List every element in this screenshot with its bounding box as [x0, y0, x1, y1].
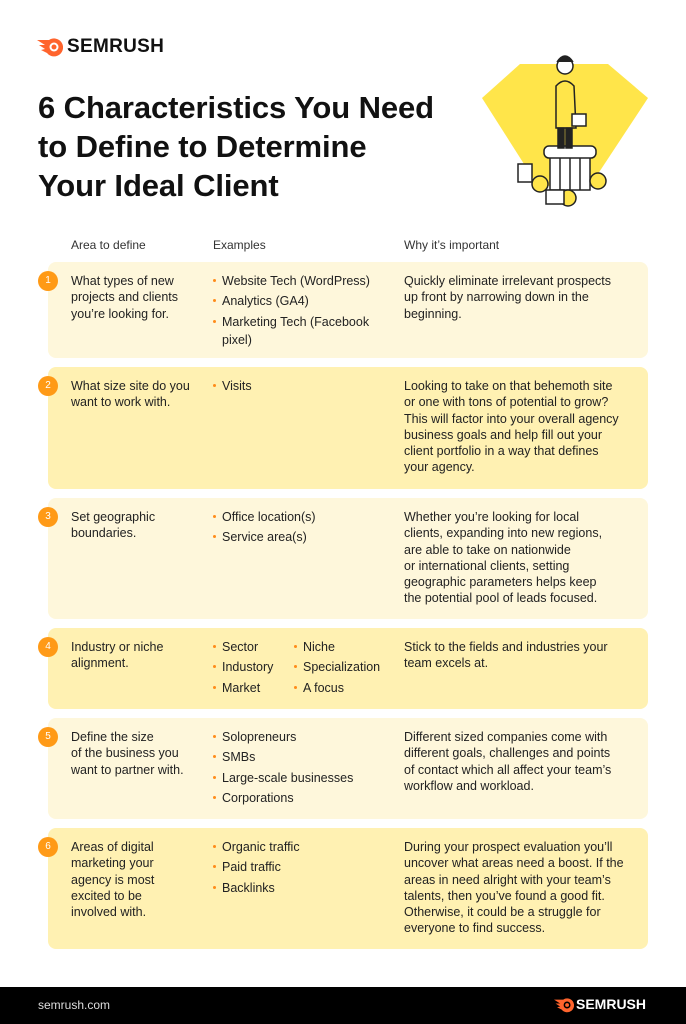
row 6: talents, then you’ve found a good fit.: [404, 889, 605, 903]
row 6: 6: [45, 841, 51, 852]
row 4: Industory: [222, 660, 273, 674]
row 2: What size site do you: [71, 379, 190, 393]
row 3: or international clients, setting: [404, 559, 569, 573]
footer: semrush.com: [38, 998, 110, 1012]
row 6: areas in need alright with your team’s: [404, 873, 611, 887]
illustration: man on pillar: [482, 55, 648, 207]
row 4: Market: [222, 681, 260, 695]
row 5: SMBs: [222, 750, 255, 764]
title: Your Ideal Client: [38, 168, 279, 203]
row 4: alignment.: [71, 656, 129, 670]
row 4: 4: [45, 641, 51, 652]
row 6: Otherwise, it could be a struggle for: [404, 905, 601, 919]
row 6: involved with.: [71, 905, 146, 919]
row 1: What types of new: [71, 274, 174, 288]
title: to Define to Determine: [38, 129, 367, 164]
row 2: or one with tons of potential to grow?: [404, 395, 608, 409]
row 5: of the business you: [71, 746, 179, 760]
row 3: 3: [45, 511, 51, 522]
row 4: A focus: [303, 681, 344, 695]
row 4: Stick to the fields and industries your: [404, 640, 608, 654]
row 3: Service area(s): [222, 530, 307, 544]
row 4: Niche: [303, 640, 335, 654]
row 1: Website Tech (WordPress): [222, 274, 370, 288]
row 2: Looking to take on that behemoth site: [404, 379, 612, 393]
row 3: Office location(s): [222, 510, 316, 524]
row 3: the potential pool of leads focused.: [404, 591, 597, 605]
row 5: Corporations: [222, 791, 294, 805]
row 3: clients, expanding into new regions,: [404, 526, 602, 540]
row 3: boundaries.: [71, 526, 136, 540]
row 1: Analytics (GA4): [222, 294, 309, 308]
row 1: pixel): [222, 333, 252, 347]
row 4: Industry or niche: [71, 640, 163, 654]
row 1: projects and clients: [71, 290, 178, 304]
row 2: want to work with.: [71, 395, 170, 409]
row 6: uncover what areas need a boost. If the: [404, 856, 624, 870]
row 6: marketing your: [71, 856, 154, 870]
row 6: Backlinks: [222, 881, 275, 895]
row 2: Visits: [222, 379, 252, 393]
row 2: 2: [45, 380, 51, 391]
row 6: [48, 828, 648, 949]
row 4: [48, 628, 648, 709]
row 4: Sector: [222, 640, 258, 654]
row 2: your agency.: [404, 460, 475, 474]
row 5: Large-scale businesses: [222, 771, 353, 785]
row 3: are able to take on nationwide: [404, 543, 571, 557]
title: [38, 90, 434, 203]
row 1: 1: [45, 275, 51, 286]
text: Examples: [213, 238, 266, 252]
row 5: Solopreneurs: [222, 730, 296, 744]
row 4: team excels at.: [404, 656, 488, 670]
title: 6 Characteristics You Need: [38, 90, 434, 125]
text: Why it’s important: [404, 238, 499, 252]
row 1: [48, 262, 648, 358]
row 3: Whether you’re looking for local: [404, 510, 579, 524]
row 2: business goals and help fill out your: [404, 428, 602, 442]
row 2: This will factor into your overall agency: [404, 412, 619, 426]
row 5: Define the size: [71, 730, 154, 744]
row 3: geographic parameters helps keep: [404, 575, 596, 589]
row 5: workflow and workload.: [404, 779, 534, 793]
row 6: excited to be: [71, 889, 142, 903]
row 6: everyone to find success.: [404, 921, 545, 935]
row 6: During your prospect evaluation you’ll: [404, 840, 612, 854]
footer logo: SEMRUSH: [576, 996, 646, 1012]
row 1: up front by narrowing down in the: [404, 290, 589, 304]
row 6: Organic traffic: [222, 840, 300, 854]
row 6: Areas of digital: [71, 840, 154, 854]
column headers: Area to define: [71, 238, 146, 252]
row 1: Marketing Tech (Facebook: [222, 315, 369, 329]
row 1: Quickly eliminate irrelevant prospects: [404, 274, 611, 288]
logo: SEMRUSH: [67, 36, 164, 57]
row 1: beginning.: [404, 307, 462, 321]
row 5: want to partner with.: [71, 763, 184, 777]
row 6: agency is most: [71, 873, 154, 887]
footer: [0, 987, 686, 1024]
row 2: client portfolio in a way that defines: [404, 444, 599, 458]
row 5: different goals, challenges and points: [404, 746, 610, 760]
row 5: 5: [45, 731, 51, 742]
row 2: [48, 367, 648, 489]
row 3: Set geographic: [71, 510, 155, 524]
row 6: Paid traffic: [222, 860, 281, 874]
row 3: [48, 498, 648, 619]
row 5: Different sized companies come with: [404, 730, 607, 744]
row 5: of contact which all affect your team’s: [404, 763, 611, 777]
row 5: [48, 718, 648, 819]
row 4: Specialization: [303, 660, 380, 674]
row 1: you’re looking for.: [71, 307, 169, 321]
